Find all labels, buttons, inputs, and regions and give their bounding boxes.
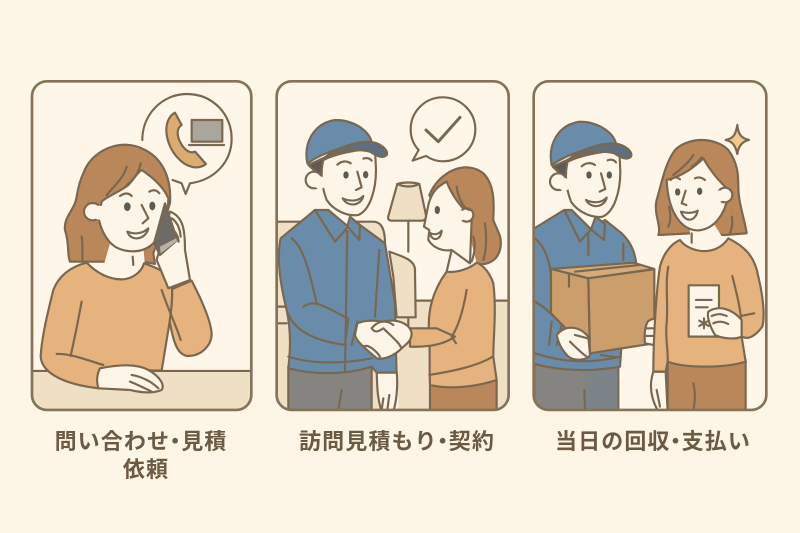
speech bubble: phone and laptop — [142, 94, 232, 194]
worker in blue jacket — [279, 120, 412, 412]
caption: same-day collection: 当日の回収・支払い — [555, 429, 751, 454]
panel: same-day collection and payment — [532, 81, 766, 412]
cardboard box — [551, 263, 654, 353]
caption: inquiry: 依頼 — [123, 457, 169, 482]
hand holding receipt — [708, 308, 742, 338]
woman shaking hands — [410, 167, 501, 412]
worker holding box — [532, 122, 660, 412]
speech bubble: check mark — [411, 97, 475, 161]
caption: inquiry: 問い合わせ・見積 — [55, 429, 227, 454]
worker head and cap — [550, 122, 631, 217]
worker hands — [557, 319, 660, 360]
icon: handset — [166, 113, 206, 167]
caption: visit and contract: 訪問見積もり・契約 — [299, 429, 495, 454]
room: floor, sofa and lamp — [275, 182, 510, 412]
caption: inquiry — [55, 429, 227, 482]
icon: laptop — [189, 120, 224, 145]
woman on the phone — [41, 145, 212, 392]
woman with receipt — [651, 140, 764, 412]
panel: inquiry by phone — [30, 81, 253, 413]
table — [30, 371, 253, 413]
receipt — [689, 285, 719, 337]
icon: sparkle — [726, 125, 749, 154]
worker head and cap — [306, 120, 387, 215]
handshake — [355, 321, 412, 359]
panel: home visit estimate and contract — [275, 81, 510, 412]
